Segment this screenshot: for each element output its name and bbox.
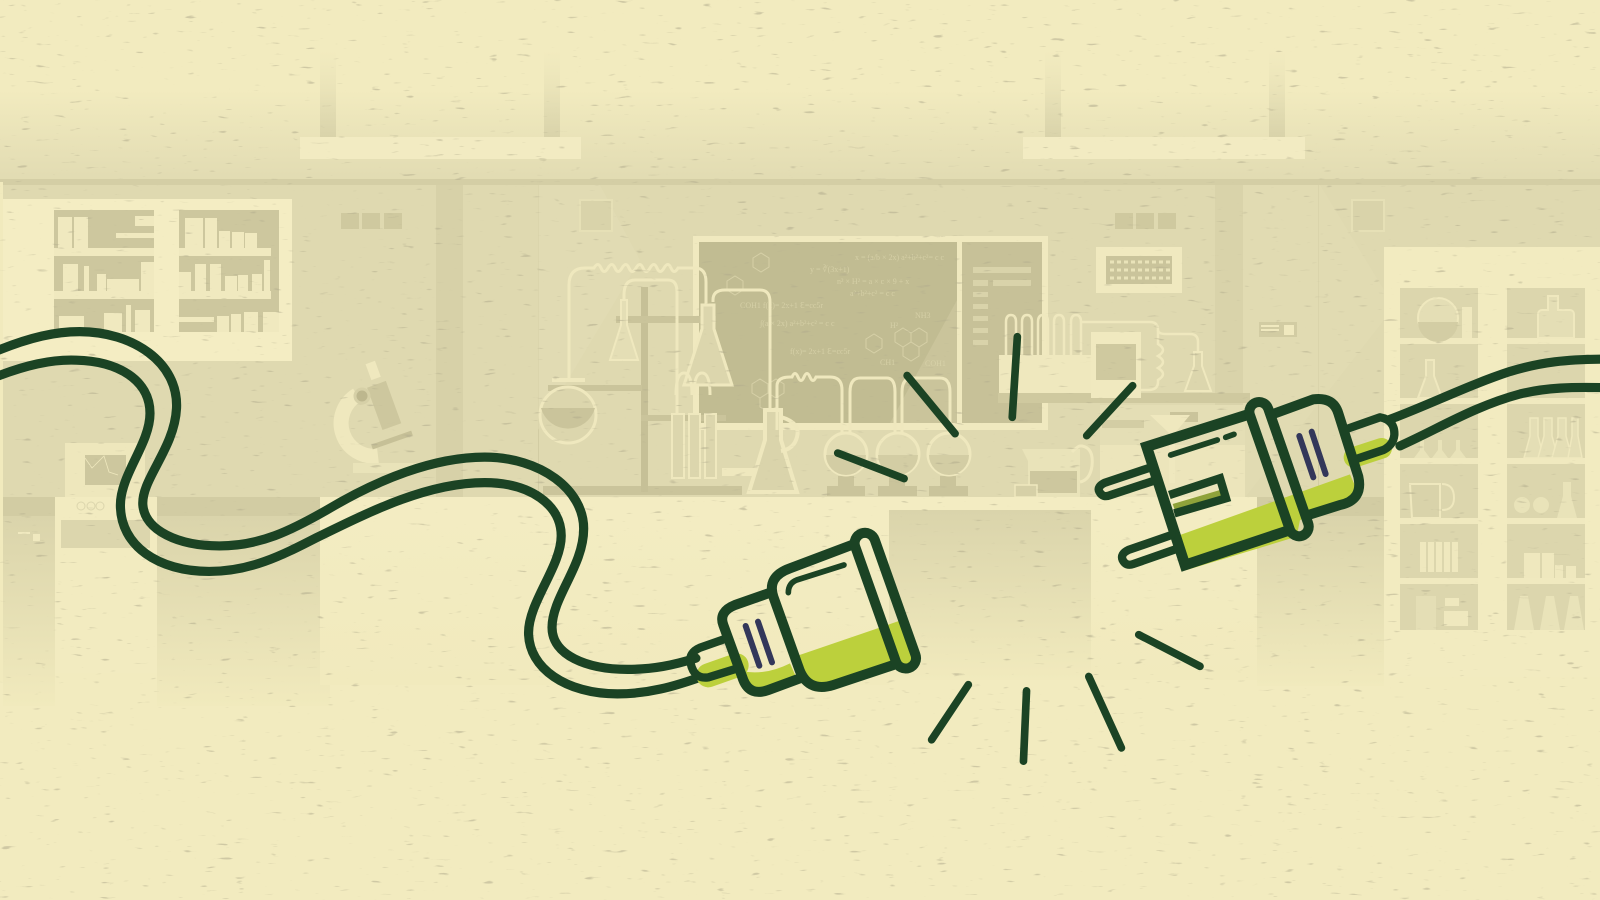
blackboard formulas: y = ∛(3x+1) [810,264,850,274]
green fill of plug left [708,621,913,693]
blackboard formulas: a²+b²+c² = c c [850,289,895,298]
cable left [0,332,702,694]
back cabinet behind right plug [1100,405,1245,497]
ceiling lamp left [300,50,581,159]
blackboard formulas: f(x)= 2x+1 ℇ=cc5r [790,347,851,356]
monitor left [65,443,145,497]
microscope [341,361,418,473]
wall cabinet left [3,199,292,361]
blackboard formulas: H² [890,321,899,330]
spark lines [838,337,1200,761]
fuse panel [1096,247,1182,293]
wall vents and posters [341,200,1384,337]
plug right [1099,399,1394,570]
blackboard formulas: x = (a/b × 2x) a²+b²+c²= c c [855,253,945,262]
jug with beaker [1015,446,1092,497]
plug left [690,530,919,693]
blackboard formulas: NH3 [915,311,931,320]
lab bench [3,497,1384,706]
blackboard formulas: ∫(a × 2x) a²+b²+c² = c c [759,319,835,328]
blackboard formulas [740,253,946,368]
test tube rack and monitor device [998,315,1250,403]
blackboard formulas: n² × H² = a × c × 9 + x [837,277,909,286]
glass cabinet right [1384,247,1600,677]
slot tint [1173,490,1223,511]
green fill of plug right [1177,448,1382,570]
distillation flasks [777,374,970,496]
blackboard formulas: COH1 f(x)= 2x+1 ℇ=cc5r [740,301,823,310]
chemistry blackboard [693,236,1048,430]
retort stand and glassware [540,264,798,495]
blackboard formulas: CH1 [880,358,895,367]
ceiling lamp right [1023,50,1305,159]
blackboard formulas: COH1 [925,359,946,368]
cable right [1390,359,1600,446]
